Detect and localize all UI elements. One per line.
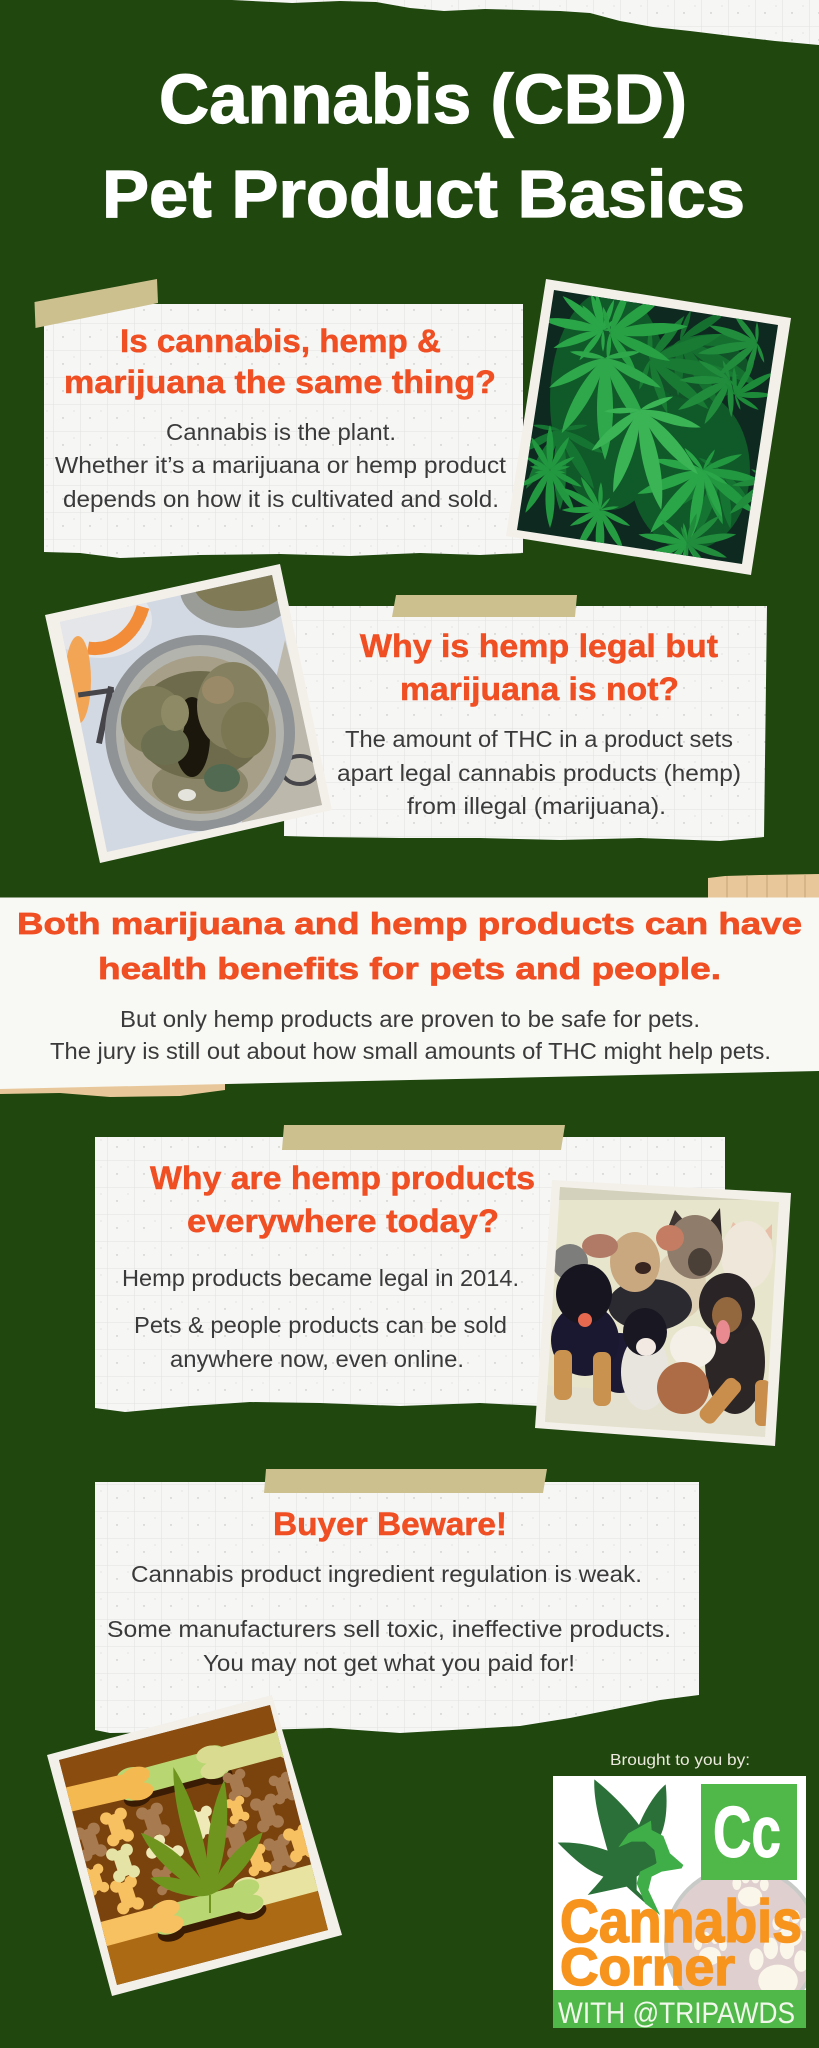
photo: puppies and kittens xyxy=(530,1180,800,1450)
headline: Both marijuana and hemp products can have xyxy=(17,906,802,941)
heading: Why are hemp products xyxy=(150,1160,535,1196)
panel: buyer beware xyxy=(95,1469,699,1733)
tape xyxy=(264,1469,547,1493)
icon: hemp leaf xyxy=(558,1779,667,1915)
tape xyxy=(34,279,158,328)
heading xyxy=(360,628,718,707)
torn paper strip at top xyxy=(232,0,819,45)
body text: anywhere now, even online. xyxy=(170,1346,464,1372)
body text: apart legal cannabis products (hemp) xyxy=(337,760,741,786)
title: Cannabis (CBD) xyxy=(159,60,687,138)
heading: Is cannabis, hemp & xyxy=(120,323,441,359)
headline xyxy=(17,906,802,986)
body text: The jury is still out about how small amounts of THC might help pets. xyxy=(50,1038,771,1064)
body text: You may not get what you paid for! xyxy=(203,1650,575,1676)
body text xyxy=(122,1265,519,1372)
title xyxy=(102,60,745,232)
paper card xyxy=(95,1482,699,1733)
paper card xyxy=(284,606,767,841)
body text: depends on how it is cultivated and sold. xyxy=(63,486,499,512)
panel: is cannabis, hemp and marijuana the same xyxy=(34,279,523,558)
body text: Cannabis product ingredient regulation is weak. xyxy=(131,1561,642,1587)
body text xyxy=(55,419,507,512)
heading xyxy=(150,1160,535,1239)
paper card xyxy=(44,304,523,558)
logo: Cannabis Corner with @Tripawds xyxy=(553,1776,818,2030)
headline: health benefits for pets and people. xyxy=(98,951,721,986)
body text: Some manufacturers sell toxic, ineffective products. xyxy=(107,1616,671,1642)
heading: marijuana the same thing? xyxy=(64,364,496,400)
heading: everywhere today? xyxy=(187,1203,499,1239)
body text: Whether it’s a marijuana or hemp product xyxy=(55,452,507,478)
wordmark xyxy=(560,1888,802,1997)
tape top right xyxy=(708,874,819,898)
body text: from illegal (marijuana). xyxy=(407,793,666,819)
body text xyxy=(50,1006,771,1064)
icon: cat and dog silhouette xyxy=(618,1821,683,1915)
tape xyxy=(392,595,577,617)
heading xyxy=(64,323,496,400)
body text: Cannabis is the plant. xyxy=(166,419,396,445)
panel: full-width health benefits band xyxy=(0,874,819,1097)
wordmark: Corner xyxy=(560,1938,735,1997)
photo: jar of hemp buds xyxy=(40,552,340,863)
heading: marijuana is not? xyxy=(400,671,679,707)
body text: But only hemp products are proven to be safe for pets. xyxy=(120,1006,700,1032)
body text: Hemp products became legal in 2014. xyxy=(122,1265,519,1291)
panel: why is hemp legal xyxy=(284,595,767,841)
body text xyxy=(337,726,741,819)
title: Pet Product Basics xyxy=(102,157,745,232)
paw print circle xyxy=(664,1876,806,1990)
tape bottom left xyxy=(0,1080,225,1097)
paper card xyxy=(95,1137,725,1412)
photo: dog biscuits with a hemp leaf xyxy=(39,1695,350,2005)
band xyxy=(0,898,819,1089)
credit: brought to you by: Brought to you by: xyxy=(610,1752,750,1769)
heading: Why is hemp legal but xyxy=(360,628,718,664)
panel: why are hemp products everywhere xyxy=(95,1125,725,1412)
body text: The amount of THC in a product sets xyxy=(345,726,733,752)
periodic tile Cc xyxy=(701,1784,797,1880)
body text: Pets & people products can be sold xyxy=(134,1312,507,1338)
heading: Buyer Beware! xyxy=(273,1506,507,1542)
photo: cannabis leaves xyxy=(506,279,791,575)
tape xyxy=(282,1125,565,1150)
periodic tile Cc: Cc xyxy=(713,1793,781,1873)
body text xyxy=(107,1561,671,1676)
